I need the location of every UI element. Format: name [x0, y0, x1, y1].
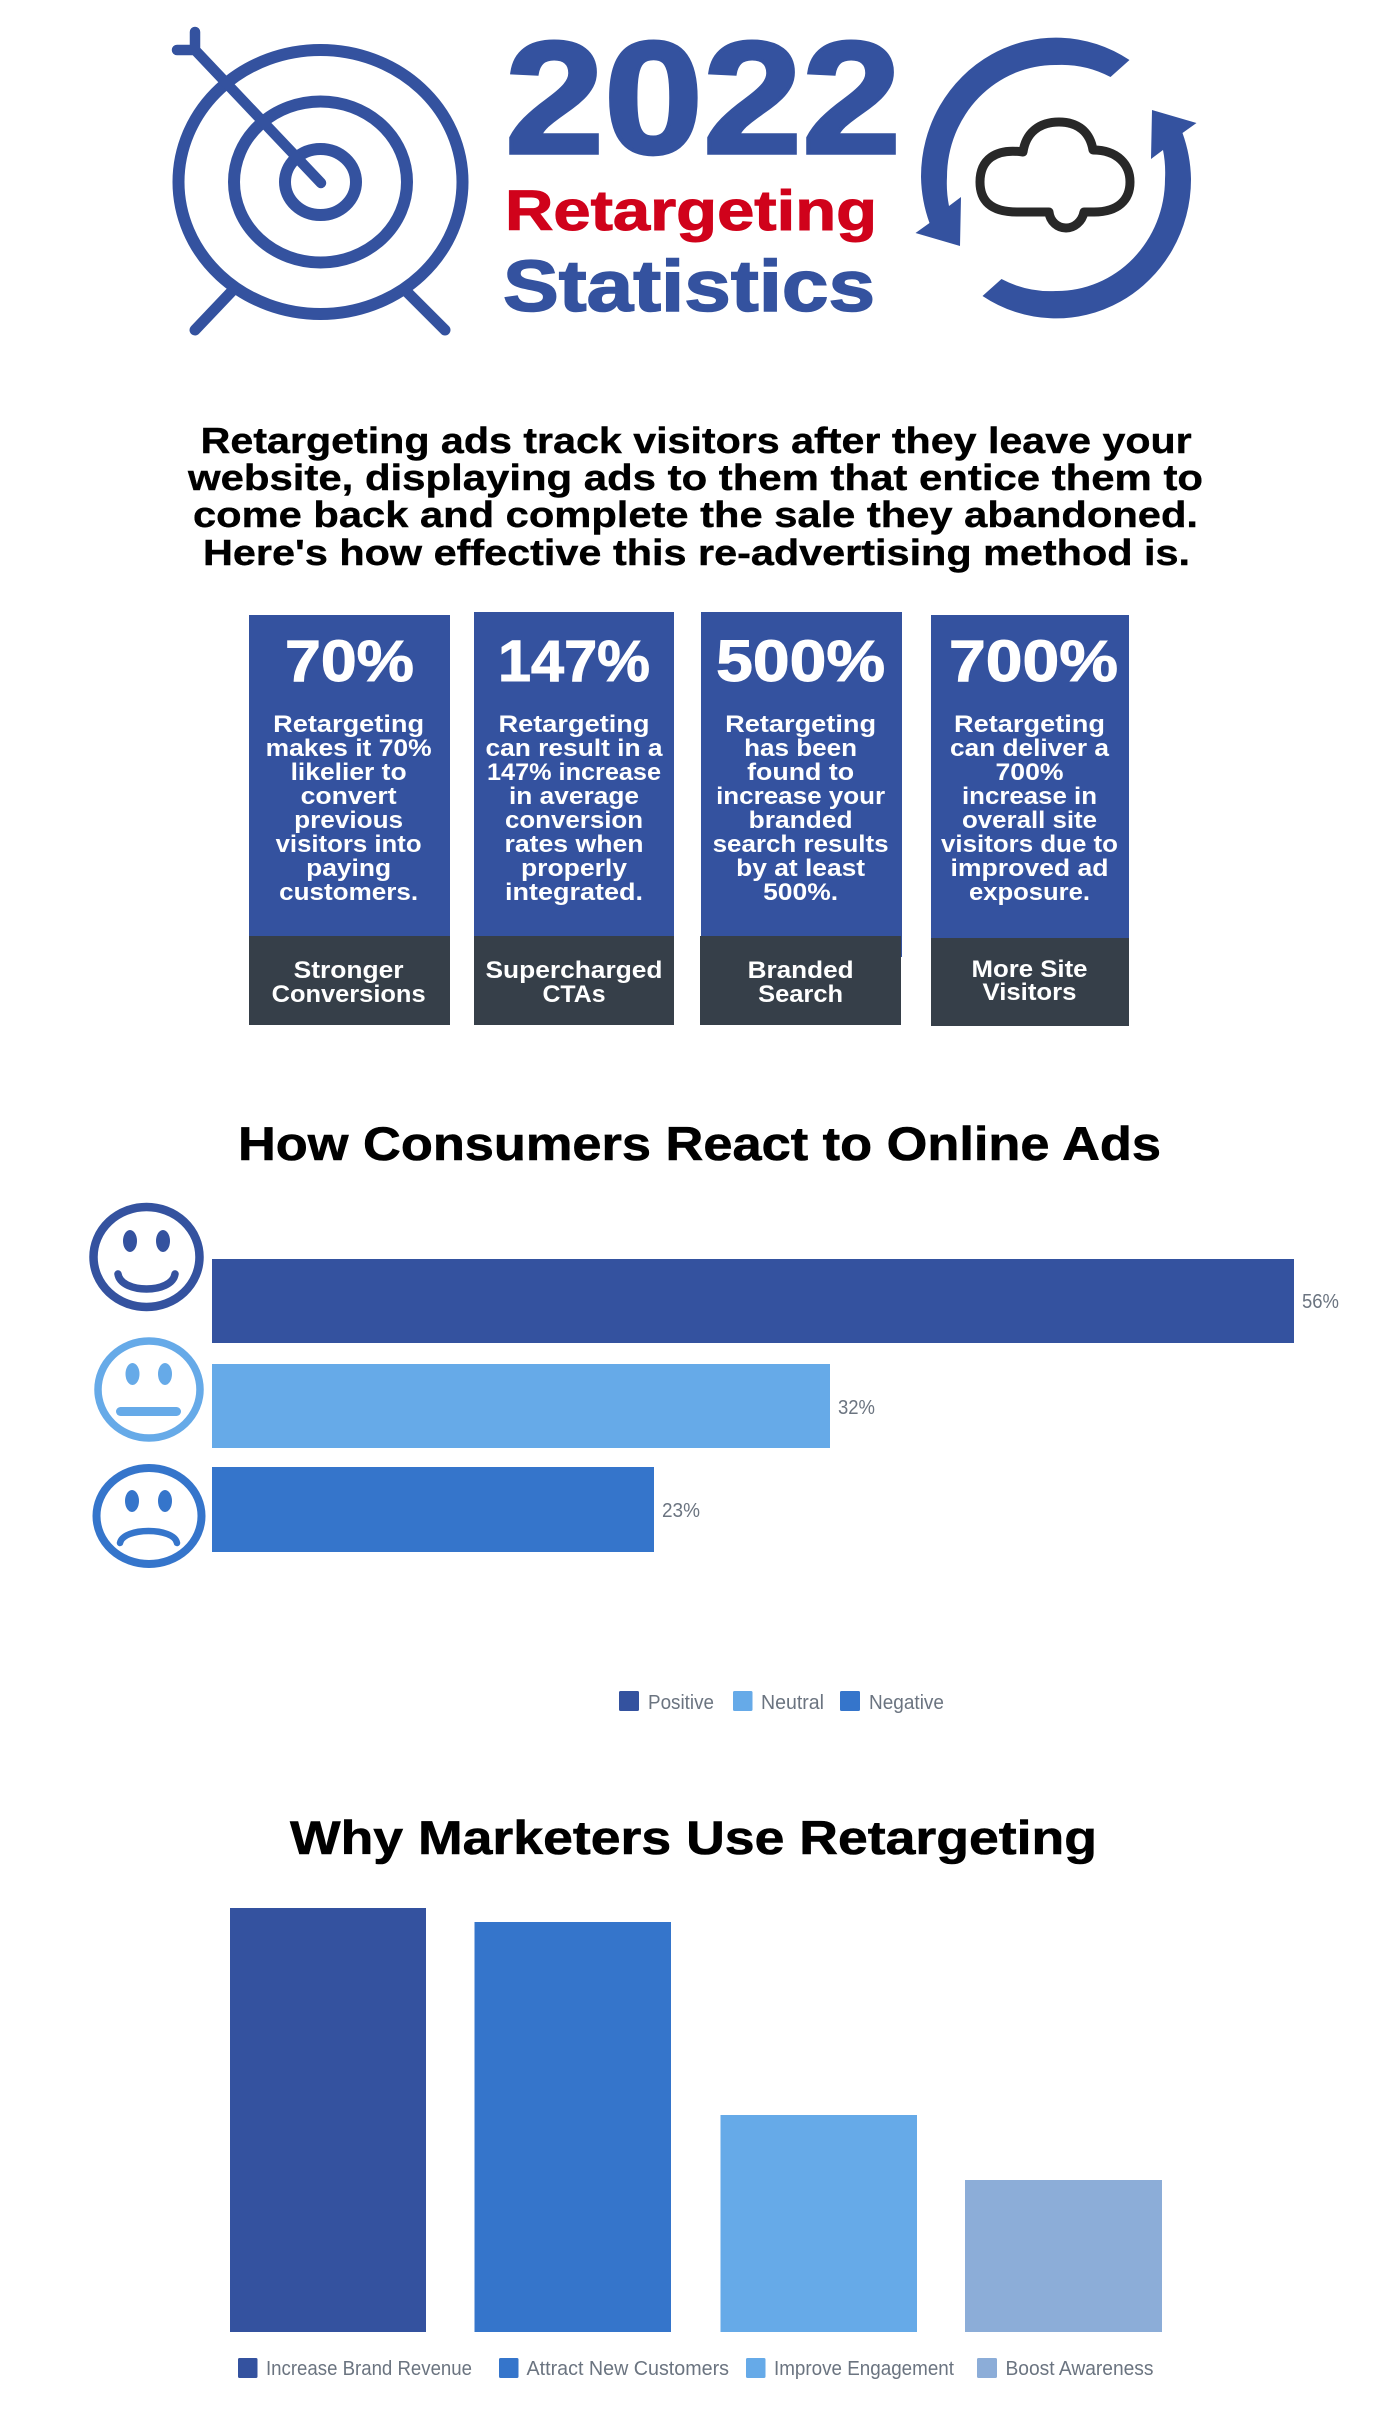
panel: stat card 700% — [931, 615, 1129, 1026]
card label: Branded — [748, 957, 854, 984]
card label: Visitors — [982, 979, 1076, 1006]
stat description — [486, 711, 663, 906]
stat description: can deliver a — [950, 735, 1110, 762]
icon: target with arrow — [177, 32, 462, 330]
stat description: properly — [521, 855, 628, 882]
stat number: 147% — [498, 629, 650, 694]
stat description: branded — [749, 807, 853, 834]
legend: consumer reactions: Positive — [648, 1692, 714, 1714]
stat description — [266, 711, 432, 906]
intro text: website, displaying ads to them that entice them to — [187, 457, 1203, 498]
card label — [272, 957, 426, 1008]
stat number: 500% — [716, 629, 885, 694]
card label: CTAs — [542, 981, 606, 1008]
intro text — [187, 420, 1203, 573]
stat description: conversion — [505, 807, 643, 834]
stat description: visitors due to — [941, 831, 1118, 858]
panel: stat card 147% — [474, 612, 674, 1025]
legend: marketer reasons: Improve Engagement — [774, 2358, 954, 2380]
value: 32%: 32% — [838, 1397, 875, 1419]
bar: positive — [212, 1259, 1294, 1343]
stat description: paying — [306, 855, 391, 882]
bar: neutral — [212, 1364, 830, 1448]
stat description: found to — [747, 759, 854, 786]
stat description: integrated. — [505, 879, 643, 906]
card label: Stronger — [294, 957, 404, 984]
card label: Supercharged — [486, 957, 662, 984]
stat description: has been — [744, 735, 857, 762]
stat description: Retargeting — [954, 711, 1105, 738]
stat description: previous — [294, 807, 403, 834]
bar: improve engagement — [720, 2115, 917, 2332]
card label — [972, 956, 1088, 1006]
card label — [486, 957, 662, 1008]
card label: Conversions — [272, 981, 426, 1008]
value: 56%: 56% — [1302, 1291, 1339, 1313]
stat description — [713, 711, 889, 906]
panel: stat card 70% — [249, 615, 450, 1025]
title: 2022: 2022 — [505, 8, 901, 187]
stat description: makes it 70% — [266, 735, 432, 762]
bar: attract new customers — [474, 1922, 671, 2332]
stat description: exposure. — [969, 879, 1090, 906]
value: 23%: 23% — [662, 1500, 700, 1522]
legend: marketer reasons: Increase Brand Revenue — [266, 2358, 472, 2380]
icon: happy face — [94, 1207, 200, 1307]
stat description: search results — [713, 831, 889, 858]
intro text: Here's how effective this re-advertising method is. — [203, 532, 1190, 573]
stat number: 70% — [285, 629, 414, 694]
legend: consumer reactions: Negative — [869, 1692, 944, 1714]
heading: Why Marketers Use Retargeting: Why Marketers Use Retargeting — [290, 1811, 1097, 1864]
stat description: likelier to — [291, 759, 407, 786]
stat description: visitors into — [276, 831, 422, 858]
bar chart: why marketers use retargeting — [230, 1908, 1162, 2332]
stat description: rates when — [504, 831, 644, 858]
title: Statistics: Statistics — [503, 247, 875, 327]
stat description: can result in a — [486, 735, 663, 762]
icon: sad face — [96, 1468, 202, 1564]
stat description: Retargeting — [725, 711, 876, 738]
stat description: customers. — [279, 879, 418, 906]
title: Retargeting: Retargeting — [505, 179, 877, 243]
stat description: 700% — [996, 759, 1064, 786]
legend: consumer reactions — [619, 1691, 944, 1714]
intro text: come back and complete the sale they abandoned. — [193, 494, 1198, 535]
card label: More Site — [972, 956, 1088, 983]
stat description: by at least — [736, 855, 865, 882]
icon: neutral face — [98, 1341, 200, 1438]
stat description: in average — [509, 783, 639, 810]
legend: marketer reasons — [238, 2358, 1154, 2380]
intro text: Retargeting ads track visitors after they leave your — [201, 420, 1192, 461]
stat description — [941, 711, 1118, 906]
bar: increase brand revenue — [230, 1908, 426, 2332]
stat number: 700% — [949, 629, 1118, 694]
bar: boost awareness — [965, 2180, 1162, 2332]
icon: cloud with circular arrows — [916, 38, 1196, 318]
stat description: 500%. — [763, 879, 838, 906]
stat description: increase in — [962, 783, 1097, 810]
stat description: convert — [301, 783, 397, 810]
bar chart: consumer reactions — [212, 1259, 1339, 1552]
legend: marketer reasons: Attract New Customers — [526, 2358, 729, 2380]
legend: marketer reasons: Boost Awareness — [1006, 2358, 1154, 2380]
legend: consumer reactions: Neutral — [761, 1692, 824, 1714]
stat description: improved ad — [950, 855, 1108, 882]
stat description: Retargeting — [273, 711, 424, 738]
stat description: 147% increase — [487, 759, 661, 786]
stat description: increase your — [716, 783, 885, 810]
card label — [748, 957, 854, 1008]
bar: negative — [212, 1467, 654, 1552]
heading: How Consumers React to Online Ads: How Consumers React to Online Ads — [238, 1117, 1161, 1170]
stat description: Retargeting — [498, 711, 650, 738]
panel: stat card 500% — [700, 612, 902, 1025]
card label: Search — [758, 981, 843, 1008]
stat description: overall site — [962, 807, 1097, 834]
